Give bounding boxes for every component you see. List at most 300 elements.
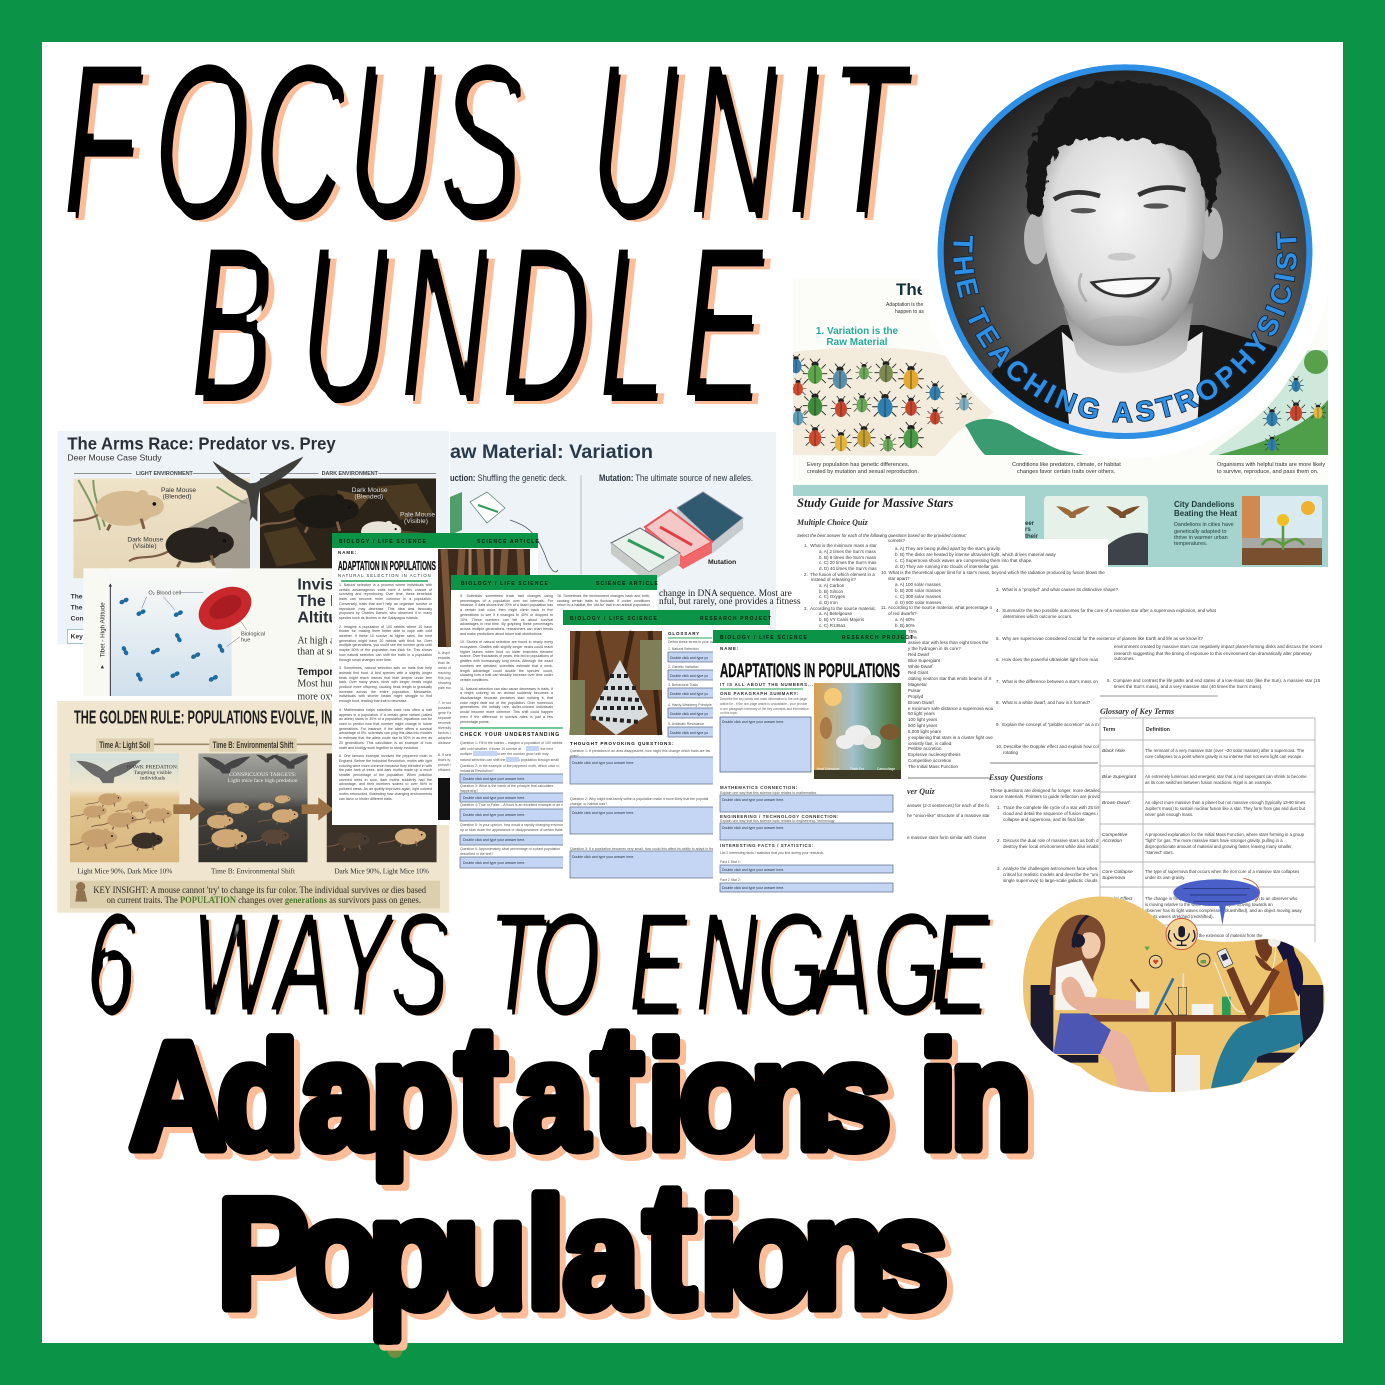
understanding questions: Question 4: True or False – A hood is an excellent example of an env — [460, 803, 567, 807]
thought questions: change, or habitat loss? — [570, 802, 607, 806]
article text — [339, 583, 432, 823]
article text: 5. One famous example involves the peppered moth in England. Before the Industrial Revolution, moths with light coloring were more common because they blended in with the pale bark of trees, and dark moths made up a much smaller percentage of the population. When pollution covered trees in soot, dark moths suddenly had the advantage, and their numbers soared to over 90% in polluted areas. As air quality improved again, light colored moths rebounded, illustrating how changing environments can favor or hinder different traits. — [339, 754, 432, 801]
quiz column two: d. D) 500 solar masses — [895, 600, 942, 605]
thought answer boxes: Double click and type your answer here. — [572, 811, 634, 815]
time A text: HAWK PREDATION: — [127, 764, 179, 770]
interesting facts — [720, 843, 893, 892]
teal band text fragment: eer — [1025, 521, 1035, 527]
name field: NAME: — [720, 646, 739, 651]
quiz clipped column: Pebble accretion — [908, 746, 942, 751]
thought answer boxes — [570, 757, 720, 878]
quiz column one: d. D) Iron — [819, 600, 838, 605]
quiz clipped column: y the hydrogen in its core? — [908, 646, 961, 651]
adaptations image — [814, 683, 901, 779]
glossary table: Brown Dwarf — [1102, 800, 1130, 806]
quiz column one: c. C) 20 times the Sun's mas — [819, 560, 877, 565]
light image labels: (Blended) — [163, 494, 192, 501]
header bar — [713, 630, 914, 643]
short answer quiz fragment — [907, 778, 990, 840]
dandelion example text — [1174, 500, 1237, 547]
key insight strip — [70, 881, 440, 908]
poster heading: The — [896, 280, 926, 299]
short answer quiz fragment: answer (2-3 sentences) for each of the fo — [907, 803, 990, 808]
blue ring — [941, 67, 1309, 436]
essay questions: collapse and supernova, and its final fate — [1003, 817, 1085, 822]
altitude heading — [297, 576, 338, 627]
short answer questions: 4. Summarize the two possible outcomes for the core of a massive star after a supernova explosion, and what — [996, 608, 1217, 613]
poster captions: to survive, reproduce, and pass them on. — [1217, 469, 1319, 475]
quiz column one: b. B) 8 times the Sun's mass — [819, 555, 877, 560]
short answer questions: 5. Why are supernovae considered crucial for the existence of planets like Earth and life as we know it? — [996, 636, 1203, 641]
glossary table: Blue Supergiant — [1102, 774, 1137, 780]
understanding questions: up or slow down the appearance or disappearance of certain traits — [460, 828, 563, 832]
blood cell labels: hue — [241, 638, 250, 644]
subtitle: 6 ways to engage: 6 WAYS TO ENGAGE — [91, 887, 995, 1049]
time A image — [62, 753, 179, 862]
clipped article column: efficient — [438, 768, 450, 772]
clipped article column: gene Fa — [438, 711, 451, 715]
clipped article column: adaptive — [438, 736, 452, 740]
altitude body: more oxyg — [297, 691, 340, 702]
quiz clipped column: Brown Dwarf — [908, 700, 935, 705]
header bar: BIOLOGY / LIFE SCIENCE — [461, 581, 549, 587]
short answer quiz fragment: he "onion-like" structure of a massive star — [907, 813, 990, 818]
descender tip over border — [386, 1340, 404, 1358]
panel: arms race — [57, 431, 449, 644]
quiz column two: 90% — [908, 635, 917, 640]
dark image labels — [352, 487, 435, 525]
step heading: variation: 1. Variation is the — [816, 326, 899, 337]
dandelion example text: Beating the Heat — [1174, 509, 1237, 518]
worksheet page 1: article: ADAPTATION IN POPULATIONS — [338, 558, 436, 573]
dandelion example text: thrive in warmer urban — [1174, 535, 1228, 541]
step heading: variation: Raw Material — [826, 337, 888, 348]
article column: 9. Scientists sometimes track trait changes using percentages of a population over set intervals. For instance, if data shows that 20% of a lizard population has a certain trait color, then might climb back in five generations to see if it changed to 40% or dropped to 10%. These numbers can tell us about survival advantages in real time. By graphing these percentages across multiple generations, researchers can chart trends and make predictions about future trait distributions. — [460, 594, 553, 636]
clipped article column: 6. Aspir — [438, 651, 451, 655]
poster intro text: happen to as — [895, 309, 924, 315]
altitude body: than at se — [297, 646, 336, 657]
quiz column two: b. B) 200 solar masses — [895, 588, 942, 593]
short answer questions: rotating — [1003, 750, 1019, 755]
adaptations image: Camouflage — [877, 767, 895, 771]
time A text: individuals — [140, 776, 165, 782]
understanding questions: Industrial Revolution? — [460, 769, 494, 773]
engineering connection: ENGINEERING / TECHNOLOGY CONNECTION: — [720, 814, 839, 819]
card stacks: mutation — [611, 492, 743, 583]
quiz column one: a. A) 2 times the Sun's mass — [819, 549, 877, 554]
environment labels: LIGHT ENVIRONMENT — [136, 471, 194, 477]
dandelion example text: City Dandelions — [1174, 500, 1235, 509]
dandelion example text: genetically adapted to — [1174, 529, 1226, 535]
understanding questions: Question 1: Fill in the blanks – imagine a population of 100 rabbits an — [460, 741, 567, 745]
essay question continuation: research suggesting that the timing of exposure to this environment can dramatically alter planetary — [1114, 651, 1312, 656]
quiz column two: 10. What is the theoretical upper limit for a star's mass, beyond which the radiation produced by fusion blows the — [881, 570, 1105, 575]
quiz clipped column: The Initial Mass Function — [908, 764, 959, 769]
hawk silhouette — [213, 457, 303, 522]
dandelion example text: temperatures. — [1174, 541, 1207, 547]
essay questions: cloud and detail the sequence of fusion stages i — [1003, 811, 1098, 816]
quiz clipped column: otating neutron star that emits beams of X — [908, 676, 992, 681]
thought questions: over? — [570, 754, 579, 758]
quiz column one — [804, 543, 877, 628]
article column — [460, 594, 553, 730]
quiz clipped column: 5,000 light years — [908, 729, 942, 734]
blood cell labels: Biological — [241, 632, 265, 638]
clipped article column: factors i — [438, 731, 451, 735]
dark image labels: (Blended) — [354, 494, 383, 501]
slide subheads: uction: Shuffling the genetic deck. — [450, 473, 567, 483]
glossary table: is moving relative to the wave source. An object moving towards an — [1145, 902, 1273, 907]
quiz column one: d. D) 40 times the Sun's mas — [819, 566, 877, 571]
understanding questions: happening? — [460, 789, 478, 793]
altitude heading: Altitu — [297, 610, 338, 627]
arms race notes: Key — [71, 634, 83, 641]
header bar — [451, 575, 659, 590]
quiz instructions: Select the best answer for each of the following questions based on the provided context: — [797, 533, 967, 538]
glossary table: Jupiter's mass) to sustain nuclear fusion like a star. They form from gas and dust but — [1145, 806, 1306, 811]
bark photo — [438, 549, 530, 647]
time B text: Light mice face high predation — [228, 777, 298, 784]
understanding questions — [460, 741, 567, 856]
essay questions: 3. Analyze the challenges astronomers face when — [997, 866, 1098, 871]
light image labels: Pale Mouse — [161, 487, 196, 494]
understanding questions: multiple you could see the number grow until may — [460, 752, 549, 756]
glossary heading: Define these terms in your ow — [668, 640, 715, 644]
short answer questions: 3. What is a "proplyd" and what causes its distinctive shape? — [996, 587, 1119, 592]
quiz column two: a. A) 60% — [895, 617, 915, 622]
time B image — [192, 753, 311, 862]
worksheet page 4: adaptations in populations — [713, 630, 914, 905]
understanding questions: Question 3: What is the name of the principle that calculates — [460, 784, 553, 788]
topic title: populations: Populations — [224, 1152, 954, 1351]
teal band text fragment: their — [1025, 534, 1039, 540]
glossary boxes: Double click and type yo — [670, 692, 708, 696]
glossary boxes: 4. Hardy-Weinberg Principle — [668, 703, 712, 707]
interesting facts: Double click and type your answer here. — [722, 886, 784, 890]
phone — [1217, 948, 1233, 968]
title: bundle: BUNDLE — [198, 208, 773, 454]
mic icon — [1166, 918, 1197, 950]
header bar: SCIENCE ARTICLE — [596, 581, 659, 587]
quiz clipped column: Red Dwarf — [908, 652, 930, 657]
second article column: 16. Sometimes the environment changes back and forth, causing certain traits to fluctuate. If cooler conditions return to a habitat, the 'old-fur' trait in an animal population — [557, 594, 650, 607]
short answer quiz fragment: e massive stars form similar with cluster — [907, 835, 987, 840]
quiz clipped column: Pulsar — [908, 688, 921, 693]
altitude axis — [99, 583, 112, 696]
panel: study guide page — [793, 496, 1217, 960]
quiz column one: c. C) R136a1 — [819, 623, 846, 628]
panel: raw material variation slide — [450, 432, 801, 640]
key insight strip: KEY INSIGHT: A mouse cannot 'try' to change its fur color. The individual survives or dies based — [93, 885, 426, 895]
header bar: SCIENCE ARTICLE — [477, 539, 540, 545]
essay questions: destroy their local environment while also enabli — [1003, 844, 1099, 849]
panel: adaptation poster with beetles — [787, 278, 1328, 567]
essay questions: Essay Questions — [988, 773, 1043, 782]
glossary table: A proposed explanation for the Initial Mass Function, where stars forming in a group — [1145, 832, 1305, 837]
answer boxes: Double click and type your answer here. — [463, 777, 525, 781]
glossary table: Accretion — [1101, 838, 1122, 844]
article subtitle: NATURAL SELECTION IN ACTION — [338, 573, 432, 578]
arms race notes: The — [71, 593, 83, 600]
altitude heading: Invis — [297, 576, 334, 593]
glossary table: An object more massive than a planet but not massive enough (typically 13-80 times — [1145, 800, 1305, 805]
worksheet page 1: article — [332, 533, 540, 825]
altitude heading: The I — [297, 593, 335, 610]
understanding questions: with cold weather. If those 10 survive at rates, the next — [460, 747, 553, 751]
one paragraph summary: on this topic. — [720, 711, 738, 715]
worksheet page 2: check your understanding — [451, 575, 659, 905]
glossary table: Term — [1103, 727, 1116, 733]
time labels — [96, 738, 333, 752]
glossary table: The change in frequency or wavelength of a wave in relation to an observer who — [1145, 896, 1298, 901]
woman left — [1049, 915, 1152, 1093]
engineering connection: Explain one way that this science topic relates to engineering / technology. — [720, 819, 835, 823]
hair — [1027, 81, 1219, 218]
oxygen cells — [119, 597, 225, 683]
dark image labels: Pale Mouse — [400, 511, 435, 518]
glossary boxes: 5. Antibiotic Resistance — [668, 722, 704, 726]
table items — [1131, 973, 1231, 1015]
thought questions — [570, 749, 714, 851]
time B text — [228, 772, 298, 784]
glossary table: Black Hole — [1102, 748, 1125, 754]
essay questions: source materials. Pointers to guide reflection are provid — [990, 794, 1101, 799]
poster captions: created by mutation and sexual reproduction. — [807, 469, 919, 475]
essay question continuation: outcomes. — [1114, 656, 1135, 661]
quiz column two: 75% — [908, 629, 917, 634]
article column: 10. Stories of natural selection are found in nearly every ecosystem. Giraffes with slightly longer necks could reach higher leaves when food on lower branches became scarce. Over thousands of years, this led to populations of giraffes with increasingly long necks. Although the exact numbers are debated, scientists estimate that a neck-length advantage could double the species' count, showing how a trait can steadily increase over time under certain conditions. — [460, 640, 553, 682]
essay questions: These questions are designed for longer, more detailed — [990, 788, 1101, 793]
thought answer boxes: Double click and type your answer here. — [572, 855, 634, 859]
clipped article column: pursuit i — [438, 763, 451, 767]
clipped article column: pale mo — [438, 686, 451, 690]
one paragraph summary: a one paragraph summary of the key concepts and information — [720, 707, 809, 711]
blob scene — [1031, 915, 1323, 1093]
arms race notes — [67, 593, 87, 643]
quiz column two: b. B) The disks are heated by intense ultraviolet light, which drives material away — [895, 552, 1056, 557]
answer boxes: Double click and type your answer here. — [463, 796, 525, 800]
clipped article column: possible — [438, 706, 451, 710]
time B text: CONSPICUOUS TARGETS: — [229, 772, 297, 778]
light image labels: Dark Mouse — [127, 536, 164, 543]
header bar — [332, 533, 540, 548]
article text: 4. Mathematics helps scientists track how often a trait appears in a population. If a certain gene variant (called an allele) starts in 30% of a population, equations can be used to predict how that number might change in future generations. For instance, if the allele offers a survival advantage of 5%, scientists can plug this data into models to estimate that the allele could rise to 50% in as few as 20 generations. This calculation is an example of how math and biology work together to study evolution. — [339, 708, 432, 750]
header bar: RESEARCH PROJECT — [842, 635, 914, 641]
quiz column two: c. C) 300 solar masses — [895, 594, 942, 599]
clipped article column: separate — [438, 716, 452, 720]
article text: 1. Natural selection is a process where individuals with certain advantageous traits have a better chance of surviving and reproducing. Over time, these beneficial traits can become more common in a population. Conversely, traits that don't help an organism survive or reproduce may decrease. This idea was famously proposed by Charles Darwin, who observed it in many species such as finches in the Galápagos Islands. — [339, 583, 432, 620]
bag — [1175, 1055, 1200, 1093]
glossary table: core collapses to a point where gravity is so intense that not even light can escape. — [1145, 754, 1303, 759]
clipped article column: mean of — [438, 666, 451, 670]
mutation label: Mutation — [708, 559, 736, 566]
environment labels — [74, 471, 436, 477]
light image labels — [127, 487, 196, 550]
article column: 11. Natural selection can also cause decreases in traits. If a bright coloring on an animal suddenly becomes a disadvantage because predators start noticing it, that color might fade out of the population. Over numerous generations, the initially rare, duller-colored individuals would become more common. This shift could happen even if the difference in survival rates is just a few percentage points. — [460, 687, 553, 724]
clipped article column: 7. In sor — [438, 701, 452, 705]
glossary table: as its core switches between fusion reactions. Rigel is an example. — [1145, 780, 1272, 785]
poster captions — [807, 462, 1325, 475]
glossary heading — [668, 631, 715, 644]
step heading: variation — [816, 326, 899, 348]
garden landscape with beetles — [1208, 350, 1328, 455]
quiz column two — [881, 538, 1105, 640]
time A text — [127, 764, 179, 782]
time labels: Time A: Light Soil — [99, 740, 150, 750]
quiz column two: of red dwarfs? — [888, 611, 917, 616]
cover for quiz column — [881, 539, 1105, 651]
teal examples band — [793, 485, 1328, 567]
essay question continuation: environment created by massive stars can negatively impact planet-forming disks and discuss the recent — [1114, 644, 1323, 649]
poster captions: Every population has genetic differences, — [807, 462, 910, 468]
answer boxes: Double click and type your answer here. — [463, 861, 525, 865]
interesting facts: Fact 2 Stat 2: — [720, 878, 741, 882]
one paragraph summary: ONE PARAGRAPH SUMMARY: — [720, 691, 799, 696]
smile — [1089, 277, 1161, 297]
altitude axis: Tibet - High Altitude — [99, 602, 106, 657]
quiz clipped column: e minimum safe distance a supernova wou — [908, 706, 994, 711]
teal band text fragment: rs — [1025, 527, 1031, 533]
topic title: adaptations in: Adaptations in — [130, 990, 1031, 1185]
poster intro text — [886, 302, 924, 315]
essay question continuation: times the Sun's mass), and a very massive star (40 times the Sun's mass). — [1114, 684, 1263, 689]
quiz clipped column: Blue Supergiant — [908, 658, 941, 663]
understanding questions: Question 5: In your opinion, how would a rapidly changing environme — [460, 823, 567, 827]
answer boxes: Double click and type your answer here. — [463, 813, 525, 817]
clipped article column: that's ty — [438, 758, 450, 762]
time A text: Targeting visible — [134, 770, 172, 776]
image captions: Light Mice 90%, Dark Mice 10% — [77, 866, 172, 875]
mathematics connection — [720, 785, 893, 812]
panel: golden rule — [57, 701, 449, 913]
quiz column two: c. C) Supernova shock waves are compressing them into that shape. — [895, 558, 1032, 563]
long p descender — [377, 1320, 400, 1345]
quiz column one: 1. What is the minimum mass a star — [804, 543, 877, 548]
short answer questions: 8. What is a white dwarf, and how is it formed? — [996, 700, 1091, 705]
clipped article column: than its — [438, 661, 450, 665]
ears — [1024, 207, 1223, 264]
eyebrows and eyes — [1054, 188, 1185, 213]
quiz column one: 2. The fusion of which element in a — [804, 572, 875, 577]
answer boxes: Double click and type your answer here. — [463, 838, 525, 842]
quiz clipped column: 50 light years — [908, 711, 936, 716]
black note box — [438, 778, 450, 820]
clipped article column: establis — [438, 656, 450, 660]
panel: invisible altitude — [83, 568, 340, 702]
quiz column one: instead of releasing it? — [811, 577, 857, 582]
title: bundle: BUNDLE — [190, 199, 765, 445]
glossary table: has its waves stretched (redshifted). — [1145, 914, 1214, 919]
one paragraph summary: Describe the key points and main information in the one-page — [720, 697, 807, 701]
speech bubble — [1173, 878, 1260, 925]
engineering connection — [720, 814, 893, 840]
quiz column one: 3. According to the source material, — [804, 606, 876, 611]
essay question continuation — [1107, 644, 1323, 689]
arms race notes: The — [71, 604, 83, 611]
interesting facts: Double click and type your answer here. — [722, 868, 784, 872]
woman right — [1211, 939, 1304, 1088]
quiz clipped column: y explaining that stars in a cluster fight ove — [908, 735, 993, 740]
thought provoking heading: THOUGHT PROVOKING QUESTIONS: — [570, 741, 674, 746]
quiz clipped column: 500 light years — [908, 723, 938, 728]
quiz clipped column: Explosive nucleosynthesis — [908, 752, 961, 757]
mathematics connection: Explain one way that this science topic relates to mathematics. — [720, 791, 817, 795]
portrait photo — [940, 67, 1310, 437]
short answer questions: 6. How does the powerful ultraviolet light from mas — [996, 657, 1099, 662]
slide title: aw Material: Variation — [450, 442, 653, 463]
quiz column two: 11. According to the source material, what percentage o — [881, 605, 992, 610]
dark environment image — [260, 478, 436, 568]
dark image labels: (Visible) — [404, 518, 428, 525]
glossary boxes — [668, 647, 718, 737]
dandelion image — [1242, 496, 1322, 565]
environment labels: DARK ENVIRONMENT — [322, 471, 379, 477]
key insight strip: on current traits. The POPULATION changes over generations as survivors pass on genes. — [107, 895, 421, 905]
slide subheads: Mutation: The ultimate source of new alleles. — [599, 473, 753, 483]
short answer questions — [996, 587, 1217, 755]
wooden arrows — [173, 797, 333, 821]
glossary table: The type of supernova that occurs when the iron core of a massive star collapses — [1145, 869, 1299, 874]
mathematics connection: Double click and type your answer here. — [722, 798, 784, 802]
quiz column one: a. A) Betelgeuse — [819, 611, 853, 616]
quiz column two: b. B) 50% — [895, 623, 915, 628]
glossary table: disproportionate amount of material and growing faster, leaving many smaller, — [1145, 844, 1293, 849]
clipped article column: disfavor — [438, 741, 451, 745]
title: focus unit: FOCUS UNIT — [70, 24, 920, 270]
portrait badge — [920, 64, 1312, 455]
quiz clipped column: Red Giant — [908, 670, 929, 675]
clipped article column: 8. If sele — [438, 753, 452, 757]
glossary boxes: 2. Genetic Variation — [668, 665, 699, 669]
essay questions: 1. Trace the complete life cycle of a star with 25 tim — [997, 805, 1101, 810]
time C image — [322, 753, 437, 862]
poster captions: Conditions like predators, climate, or habitat — [1012, 462, 1121, 468]
poster intro text: Adaptation is the — [886, 302, 923, 308]
header bar: RESEARCH PROJECT — [700, 616, 772, 622]
red blood cell — [191, 578, 259, 639]
one paragraph summary — [720, 691, 811, 772]
short answer quiz fragment: ver Quiz — [907, 787, 936, 796]
dandelion example text: Dandelions in cities have — [1174, 522, 1234, 528]
topic title: populations: Populations — [218, 1146, 948, 1345]
altitude body — [297, 635, 340, 702]
mutation text: nful, but rarely, one provides a fitness — [659, 596, 801, 607]
glossary boxes: Double click and type yo — [670, 731, 708, 735]
altitude subhead: Tempora — [297, 667, 339, 678]
understanding questions: Question 6: Approximately what percentage of a plant population — [460, 847, 560, 851]
quiz column two: star apart? — [888, 576, 910, 581]
title: focus unit: FOCUS UNIT — [62, 16, 912, 262]
clipped article column: showing — [438, 681, 451, 685]
article text: 2. Imagine a population of 100 rabbits where 10 have thicker fur, making them better able to cope with cold weather. If these 10 survive at higher rates, the next generation might have 20 rabbits with thick fur. Over multiple generations, you could see the number grow until maybe 50% of the population has thick fur. This shows how natural selection can shift the traits in a population through small changes over time. — [339, 625, 432, 662]
interesting facts: INTERESTING FACTS / STATISTICS: — [720, 843, 814, 848]
essay questions: 2. Discuss the dual role of massive stars as both d — [997, 838, 1099, 843]
suit and shirt — [992, 325, 1278, 424]
clipped article column: this pop — [438, 676, 451, 680]
essay questions: critical for realistic models and describe the "uni — [1003, 872, 1098, 877]
beetle collection — [787, 354, 972, 452]
glossary table: Core-Collapse — [1102, 869, 1133, 875]
glossary boxes: Double click and type yo — [670, 712, 708, 716]
quiz clipped column: Competitive accretion — [908, 758, 952, 763]
earphone cord — [1214, 948, 1276, 1012]
quiz clipped column: White Dwarf — [908, 664, 933, 669]
shuffling card sketch — [450, 492, 558, 572]
nose and chin shading — [1078, 252, 1172, 320]
study guide title: Study Guide for Massive Stars — [797, 496, 953, 510]
tagline: IT IS ALL ABOUT THE NUMBERS... — [720, 682, 814, 687]
quiz column two: comets? — [888, 538, 906, 543]
